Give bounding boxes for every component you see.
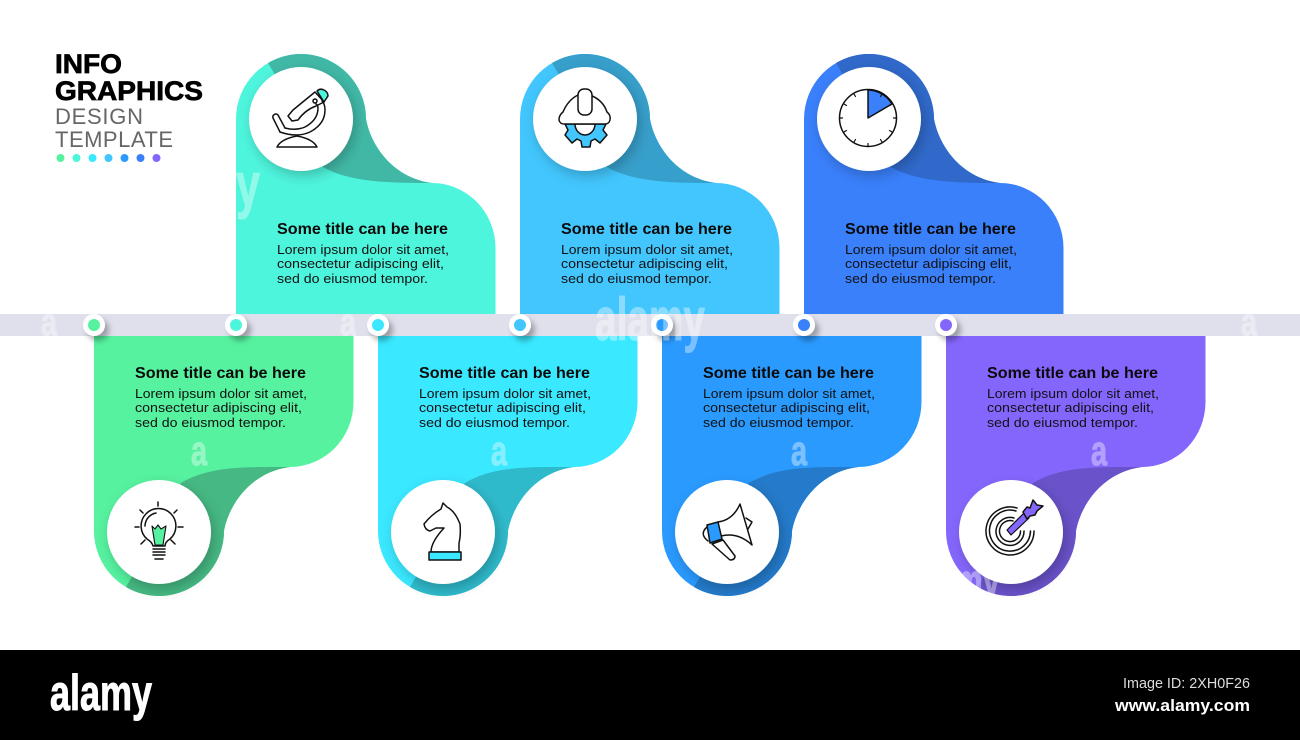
footer image id: Image ID: 2XH0F26 [1123, 675, 1250, 692]
text: card 3: consectetur adipiscing elit, [845, 256, 1012, 271]
text: card 7: Lorem ipsum dolor sit amet, [987, 386, 1159, 401]
text: card 2: Lorem ipsum dolor sit amet, [561, 242, 733, 257]
watermarks: a [340, 302, 357, 344]
text: card 6: Lorem ipsum dolor sit amet, [703, 386, 875, 401]
icon: helmet and gear [559, 89, 610, 147]
title: DESIGN [55, 104, 143, 129]
icon: target with arrow [986, 500, 1043, 555]
title: GRAPHICS [55, 76, 203, 106]
watermarks: a [1241, 302, 1258, 344]
icon: chess knight [424, 503, 461, 560]
watermarks: a [1091, 427, 1107, 474]
timeline nodes [83, 314, 957, 336]
panel: bottom card 3 blue [662, 336, 922, 596]
text: card 1: Lorem ipsum dolor sit amet, [277, 242, 449, 257]
text: card 5: Lorem ipsum dolor sit amet, [419, 386, 591, 401]
text: card 6: Some title can be here [703, 365, 874, 382]
panel: bottom card 2 cyan [378, 336, 638, 596]
text: card 4: sed do eiusmod tempor. [135, 415, 286, 430]
icon: clock [840, 90, 896, 146]
watermarks: alamy [595, 286, 705, 353]
text: card 5: sed do eiusmod tempor. [419, 415, 570, 430]
icon: megaphone [703, 504, 752, 560]
footer bar [0, 650, 1300, 740]
watermarks: a [491, 427, 507, 474]
text: card 6 [703, 365, 875, 430]
footer logo: alamy [50, 665, 152, 721]
title: TEMPLATE [55, 127, 173, 152]
watermarks: y [236, 151, 260, 220]
text: card 5 [419, 365, 591, 430]
text: card 1: consectetur adipiscing elit, [277, 256, 444, 271]
text: card 3: sed do eiusmod tempor. [845, 271, 996, 286]
text: card 7: sed do eiusmod tempor. [987, 415, 1138, 430]
text: card 5: Some title can be here [419, 365, 590, 382]
text: card 1: Some title can be here [277, 221, 448, 238]
text: card 2: consectetur adipiscing elit, [561, 256, 728, 271]
panel: bottom card 4 purple [946, 336, 1206, 596]
title: INFO [55, 49, 122, 79]
panel: top card 1 teal [236, 54, 496, 314]
panel: bottom card 1 green [94, 336, 354, 596]
panel: top card 2 sky [520, 54, 780, 314]
text: card 1 [277, 221, 449, 286]
text: card 1: sed do eiusmod tempor. [277, 271, 428, 286]
text: card 7: consectetur adipiscing elit, [987, 400, 1154, 415]
text: card 4: consectetur adipiscing elit, [135, 400, 302, 415]
watermarks: a [191, 427, 207, 474]
legend dots [56, 154, 160, 162]
text: card 6: consectetur adipiscing elit, [703, 400, 870, 415]
text: card 4: Some title can be here [135, 365, 306, 382]
footer url: www.alamy.com [1114, 696, 1250, 715]
panel: top card 3 royal blue [804, 54, 1064, 314]
text: card 7: Some title can be here [987, 365, 1158, 382]
icon: light bulb [135, 502, 183, 559]
timeline bar [0, 314, 1300, 336]
icon: microscope [273, 89, 328, 147]
text: card 7 [987, 365, 1159, 430]
watermarks [41, 151, 1258, 606]
text: card 5: consectetur adipiscing elit, [419, 400, 586, 415]
text: card 2: Some title can be here [561, 221, 732, 238]
text: card 4 [135, 365, 307, 430]
title [55, 49, 203, 152]
text: card 3: Lorem ipsum dolor sit amet, [845, 242, 1017, 257]
watermarks: a [791, 427, 807, 474]
watermarks: a [41, 302, 58, 344]
text: card 2: sed do eiusmod tempor. [561, 271, 712, 286]
text: card 6: sed do eiusmod tempor. [703, 415, 854, 430]
text: card 3 [845, 221, 1017, 286]
text: card 4: Lorem ipsum dolor sit amet, [135, 386, 307, 401]
watermarks: my [955, 555, 1000, 606]
text: card 3: Some title can be here [845, 221, 1016, 238]
text: card 2 [561, 221, 733, 286]
